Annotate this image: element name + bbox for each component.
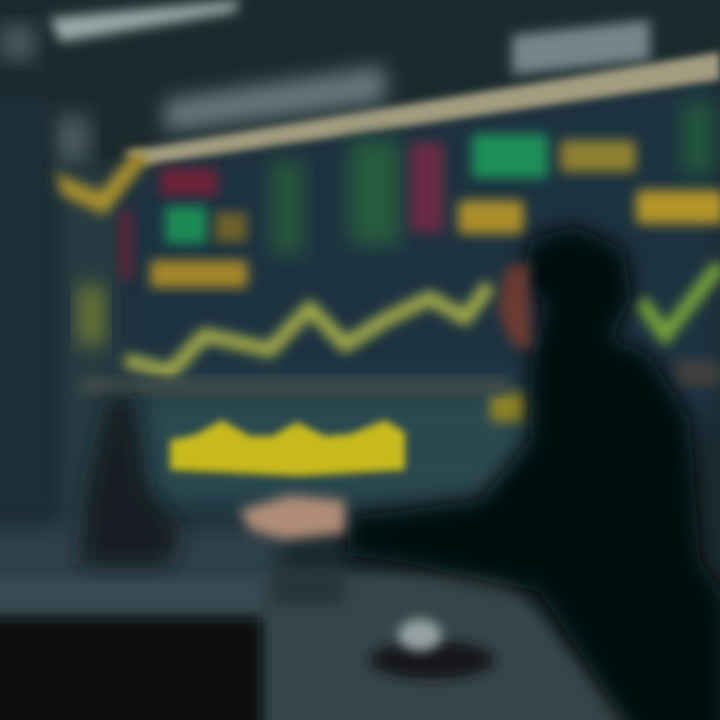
lower monitor glow xyxy=(140,385,530,505)
beige beam xyxy=(122,52,720,165)
microphone stand xyxy=(80,395,180,565)
mouse xyxy=(398,619,442,651)
lower band xyxy=(80,378,510,394)
face xyxy=(497,262,532,350)
keyboard xyxy=(272,568,344,604)
mouse pad xyxy=(370,641,494,679)
monitor panel xyxy=(125,75,720,510)
person xyxy=(348,226,720,720)
candle bars xyxy=(160,102,714,255)
right line chart xyxy=(640,265,720,335)
body xyxy=(348,226,720,720)
left pillar xyxy=(0,95,48,515)
right side band xyxy=(675,360,720,386)
desk xyxy=(0,525,640,720)
left vertical accents xyxy=(78,210,134,345)
ceiling and lights xyxy=(0,0,720,170)
left screen edge xyxy=(58,170,128,550)
hand xyxy=(240,495,345,540)
yellow area chart xyxy=(170,420,405,476)
line chart xyxy=(125,285,490,372)
yellow tags xyxy=(150,140,720,422)
chevron logo xyxy=(55,150,150,215)
